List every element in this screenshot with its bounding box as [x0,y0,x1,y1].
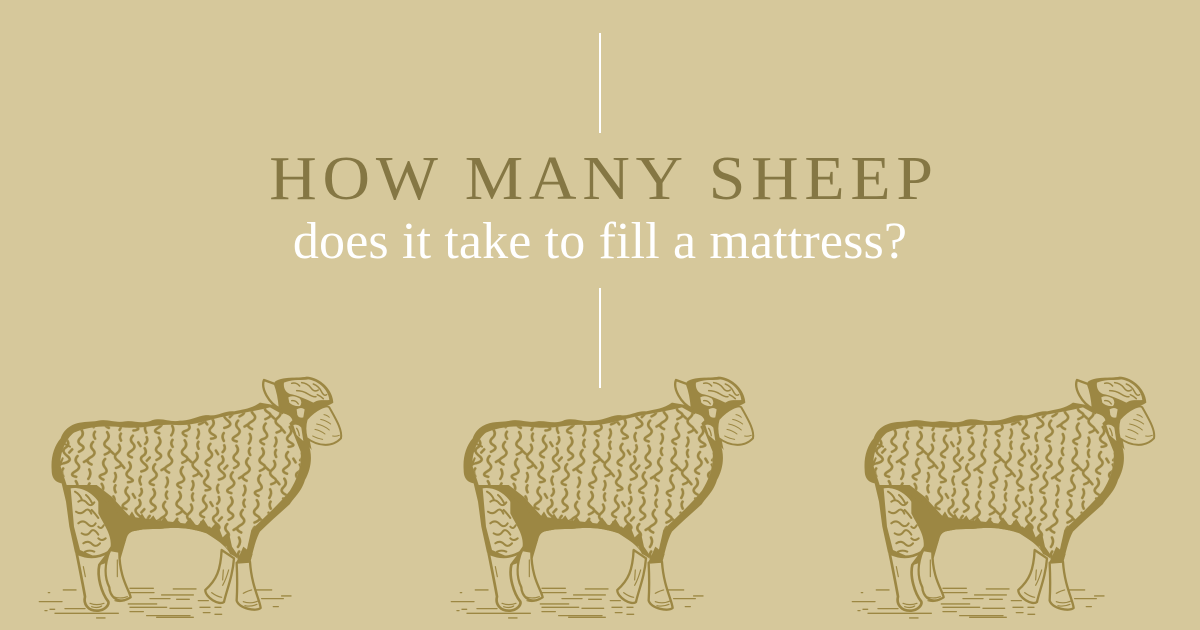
sheep left [30,370,350,620]
bottom vertical line [599,288,601,388]
title: how many sheep: HOW MANY SHEEP [269,145,939,213]
sheep center [442,370,762,620]
sheep illustrations row [38,376,1156,619]
subtitle: does it take to fill a mattress: does it take to fill a mattress? [293,213,907,270]
sheep right [843,370,1163,620]
top vertical line [599,33,601,133]
